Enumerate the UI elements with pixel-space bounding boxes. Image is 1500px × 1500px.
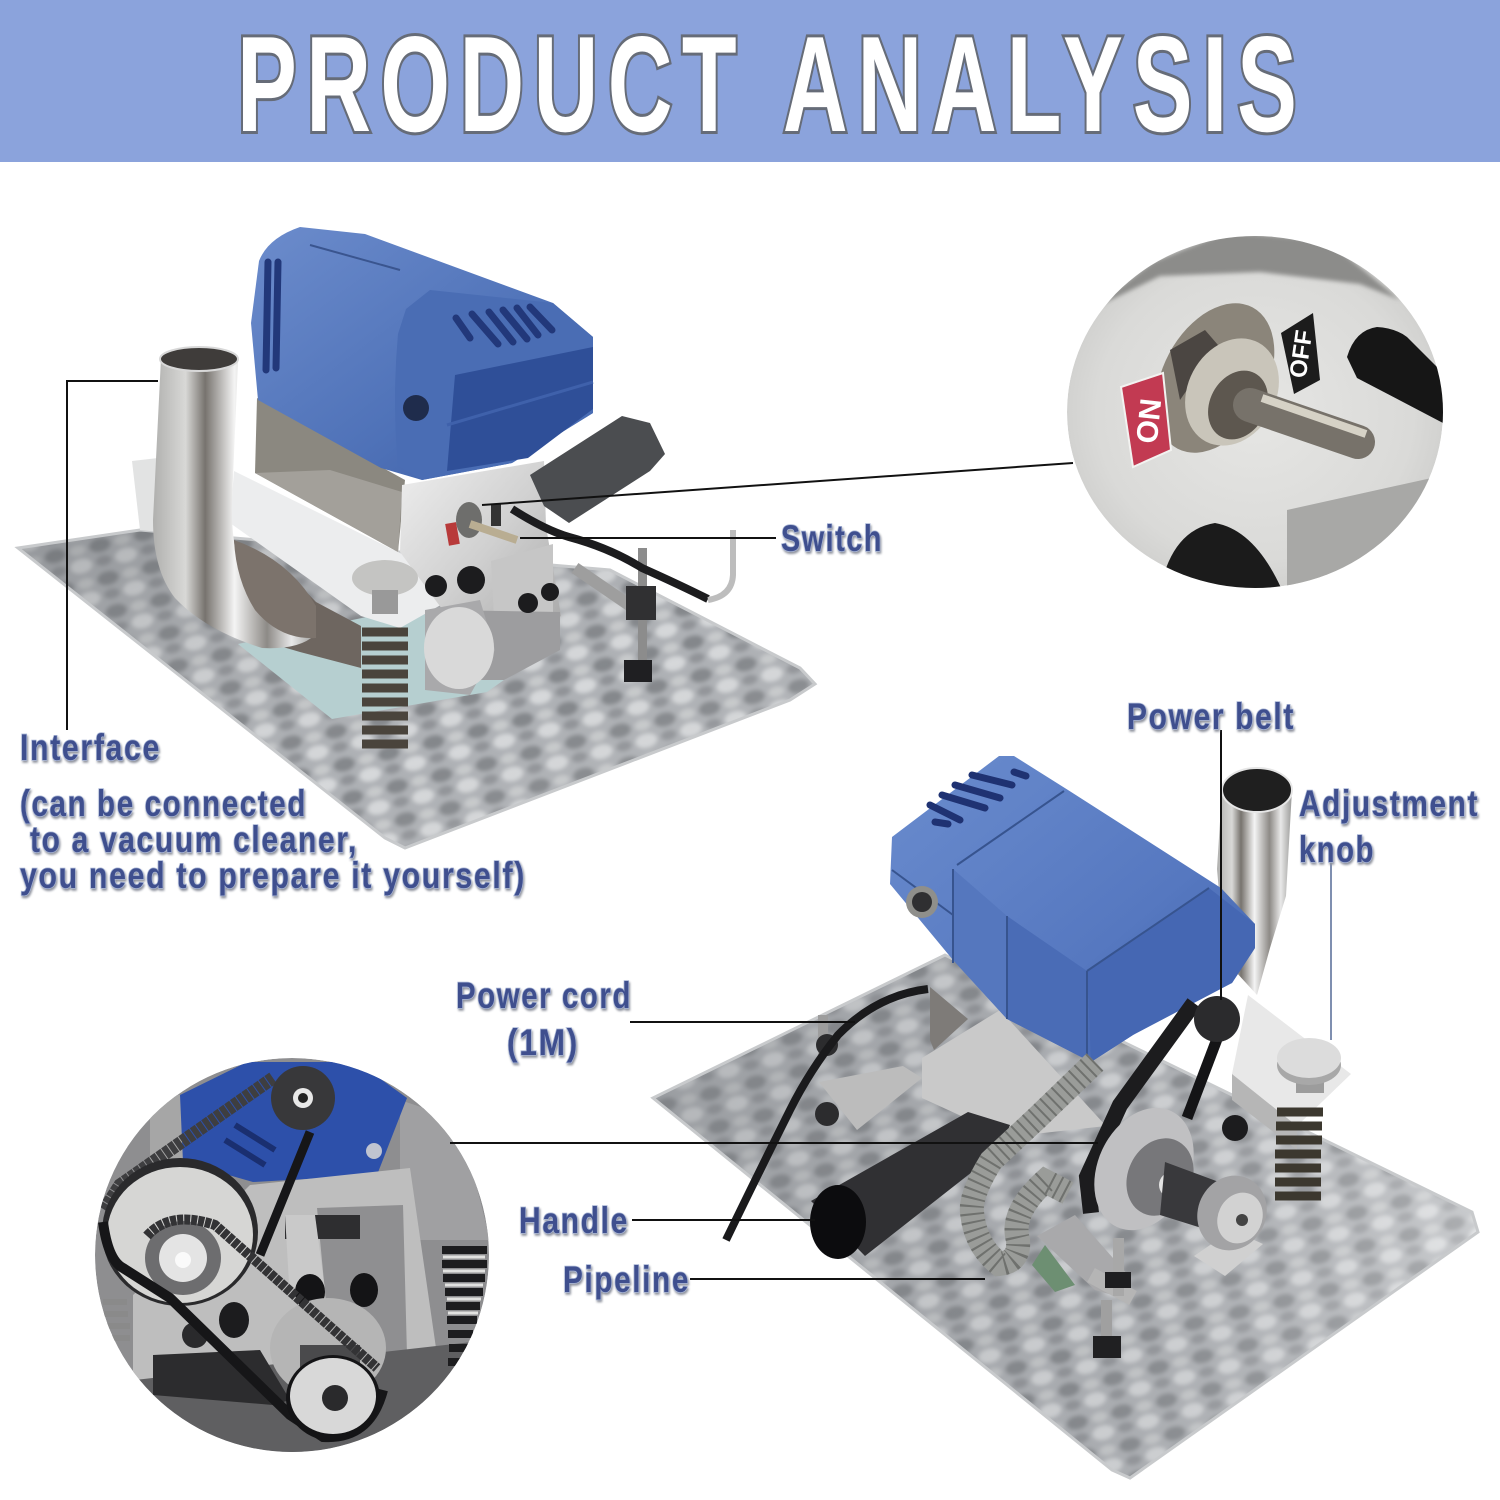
block [1287, 478, 1429, 586]
handle [530, 416, 665, 523]
product photo: front view [0, 227, 830, 860]
title banner [0, 0, 1500, 162]
frame [930, 987, 968, 1050]
title: ANALYSIS [783, 9, 1308, 161]
callout line: switch zoom [482, 463, 1073, 505]
label: adjustment knob: knob [1299, 829, 1375, 870]
zoom circle: belt detail [90, 1058, 490, 1460]
cords [1347, 327, 1445, 424]
pipe [153, 358, 316, 648]
title: PRODUCT [237, 9, 747, 161]
big pulley [1075, 1092, 1213, 1246]
elbow shadow [225, 540, 361, 668]
lower bracket [1037, 1215, 1130, 1300]
callout line: power belt [1220, 730, 1222, 1000]
small pulley [1160, 1162, 1262, 1240]
lever [1250, 405, 1358, 442]
top band [1106, 236, 1398, 305]
callout line: belt zoom [450, 1142, 1098, 1144]
lower pulley [270, 1298, 386, 1384]
pipe [1217, 790, 1292, 995]
motor blue [180, 1062, 407, 1182]
cord [726, 989, 928, 1240]
pulley [425, 600, 495, 695]
label: interface: Interface [20, 727, 161, 768]
white sheet [230, 471, 446, 628]
callout line: adjustment knob [1330, 862, 1332, 1040]
off label [1281, 313, 1320, 394]
front block [400, 461, 561, 650]
label: power cord: (1M) [507, 1022, 579, 1063]
label: handle: Handle [519, 1200, 629, 1241]
plate [640, 940, 1490, 1485]
label: pipeline: Pipeline [563, 1259, 690, 1300]
toggle switch [445, 522, 460, 546]
rear bracket panel [255, 398, 405, 552]
toothed belt top [104, 1078, 273, 1210]
label: power cord: Power cord [456, 975, 632, 1016]
on label: ON [1131, 397, 1168, 445]
label: interface note [20, 783, 526, 896]
label: power belt: Power belt [1127, 696, 1295, 737]
callout line: pipeline [690, 1278, 985, 1280]
label: interface note: (can be connected [20, 783, 307, 824]
spring [362, 632, 408, 744]
block [133, 1168, 437, 1388]
floor [139, 1342, 468, 1452]
knob [352, 560, 418, 596]
stud [575, 568, 648, 618]
motor [890, 756, 1255, 1062]
on label [1121, 373, 1171, 467]
knob arm [1232, 995, 1351, 1126]
adjustment knob [1296, 1065, 1324, 1093]
label: interface note: to a vacuum cleaner, [30, 819, 358, 860]
belts [1087, 1003, 1194, 1213]
label: interface note: you need to prepare it yourself) [20, 855, 526, 896]
hose [972, 1062, 1095, 1264]
inner toothed belt [147, 1220, 377, 1368]
hose backdrop [150, 1095, 183, 1162]
callout line: switch [520, 537, 776, 539]
callout line: power cord [630, 1021, 855, 1023]
zoom circle: on/off switch [1067, 232, 1445, 600]
label: power cord [456, 975, 632, 1063]
handle [811, 1112, 1010, 1256]
black belt [103, 1222, 383, 1437]
label: switch: Switch [781, 518, 883, 559]
label: adjustment knob [1299, 783, 1479, 870]
callout line: interface [67, 381, 158, 730]
product photo: rear view [640, 756, 1490, 1485]
toggle nut [1161, 303, 1274, 453]
plate [22, 532, 813, 846]
big pulley [102, 1158, 258, 1306]
title [237, 9, 1308, 161]
callout line: handle [632, 1219, 815, 1221]
motor [251, 227, 593, 480]
springs [442, 1250, 487, 1362]
top pulley [271, 1066, 335, 1130]
cord [512, 509, 708, 599]
off label: OFF [1285, 328, 1318, 380]
